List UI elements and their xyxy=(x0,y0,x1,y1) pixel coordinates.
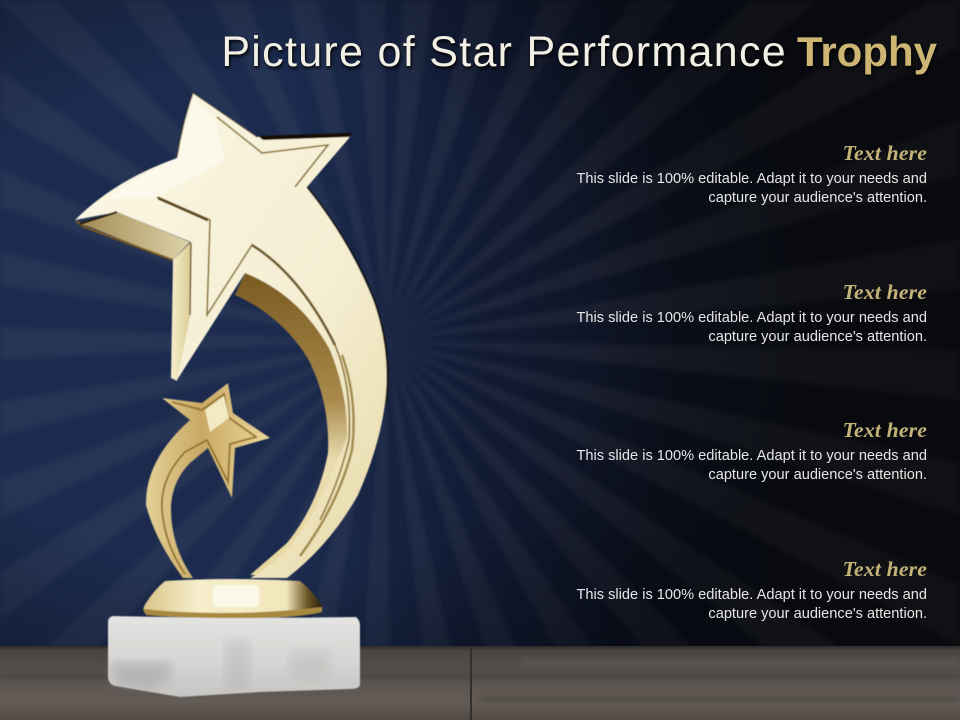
text block 1 xyxy=(576,141,927,206)
star front bevel lines xyxy=(157,117,349,520)
star and tail face xyxy=(75,93,387,578)
text block 4: This slide is 100% editable. Adapt it to your needs and xyxy=(577,587,927,603)
text block 1: This slide is 100% editable. Adapt it to your needs and xyxy=(577,171,927,187)
text block 3: capture your audience's attention. xyxy=(708,466,927,482)
star underside xyxy=(80,212,190,260)
text block 1: capture your audience's attention. xyxy=(708,190,927,206)
text block 2: capture your audience's attention. xyxy=(708,328,927,344)
small star xyxy=(146,383,270,578)
text block 2 xyxy=(576,280,927,344)
marble base xyxy=(108,616,360,697)
star dark top edge xyxy=(258,133,352,140)
text block 4: Text here xyxy=(843,557,927,581)
text block 2: This slide is 100% editable. Adapt it to your needs and xyxy=(577,310,927,326)
text block 3: Text here xyxy=(843,418,927,442)
big star swoosh and star xyxy=(75,93,388,578)
floor: wooden table xyxy=(0,646,960,720)
metal base xyxy=(143,579,322,618)
swoosh hollow xyxy=(235,273,357,575)
text block 3 xyxy=(576,418,927,482)
text block 1: Text here xyxy=(843,141,927,165)
title: Picture of Star PerformanceTrophy xyxy=(221,28,937,76)
left tip gold edge xyxy=(76,221,173,260)
text block 3: This slide is 100% editable. Adapt it to your needs and xyxy=(577,448,927,464)
text block 4: capture your audience's attention. xyxy=(708,606,927,622)
text block 2: Text here xyxy=(843,280,927,304)
text block 4 xyxy=(576,557,927,622)
